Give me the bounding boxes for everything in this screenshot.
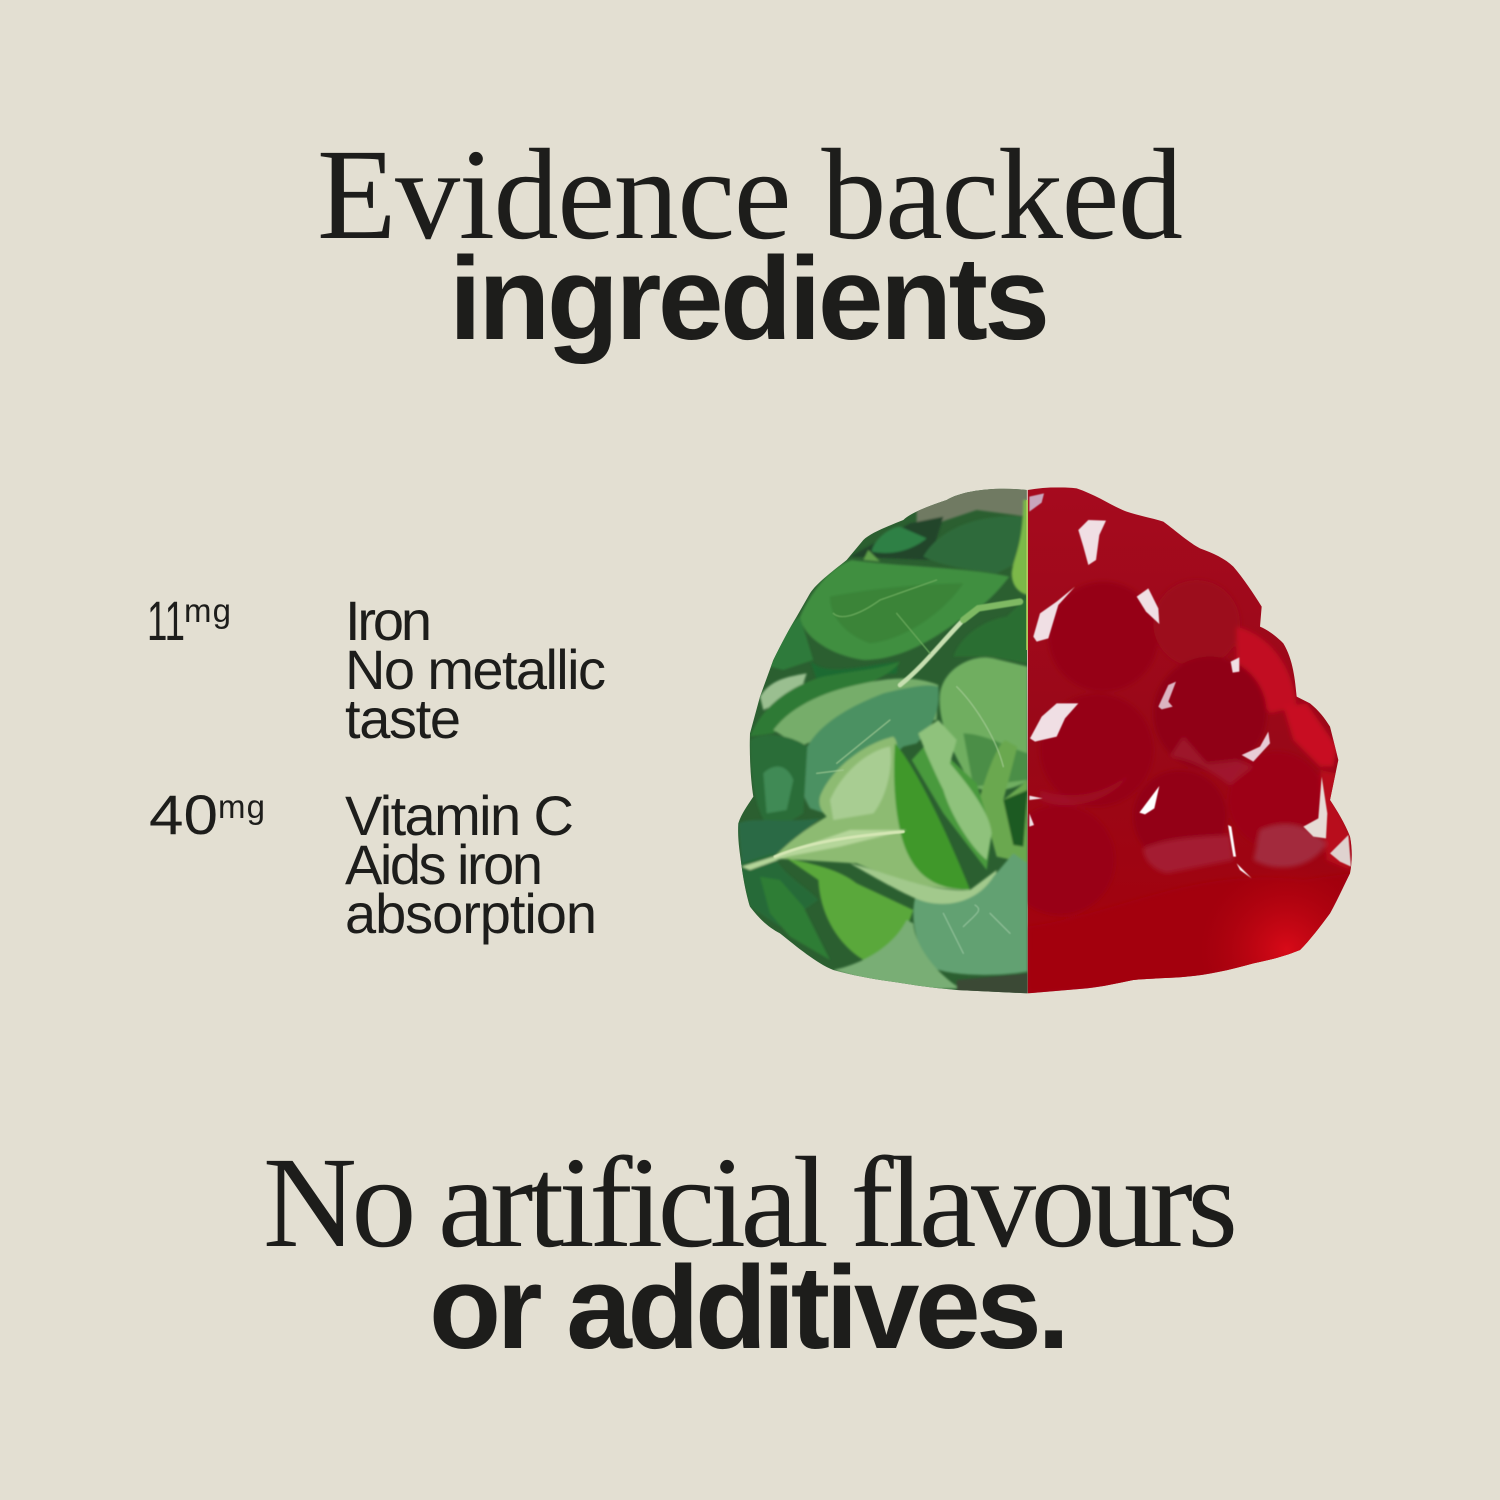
iron row: mg (184, 592, 231, 629)
vitamin C row: 40 (149, 783, 218, 846)
vitamin C row: Vitamin C (345, 784, 574, 847)
vitamin C row: absorption (345, 882, 597, 945)
gummy highlights (1029, 493, 1351, 878)
vitamin C row (149, 783, 597, 945)
iron row (147, 589, 606, 750)
iron row: 11 (147, 589, 185, 652)
thin seam (1026, 500, 1028, 650)
spinach stems and veins (775, 580, 1020, 953)
title: Evidence backed ingredients (317, 123, 1183, 365)
iron row: No metallic (345, 638, 606, 701)
nutrient list (147, 589, 606, 945)
closing statement: No artificial flavours or additives.: No artificial flavours (263, 1131, 1238, 1275)
gummy lobes (1005, 580, 1350, 993)
gummy half (1028, 487, 1352, 994)
vitamin C row: mg (218, 788, 265, 825)
title: Evidence backed ingredients: Evidence backed (317, 123, 1183, 267)
vitamin C row: Aids iron (345, 833, 543, 896)
title: Evidence backed ingredients: ingredients (449, 233, 1050, 365)
iron row: taste (345, 687, 461, 750)
illustration: half spinach, half red gummy raspberry (730, 480, 1360, 1000)
iron row: Iron (345, 589, 432, 652)
spinach half (730, 480, 1030, 1000)
closing statement: No artificial flavours or additives.: or additives. (429, 1242, 1070, 1374)
closing statement: No artificial flavours or additives. (263, 1131, 1238, 1374)
